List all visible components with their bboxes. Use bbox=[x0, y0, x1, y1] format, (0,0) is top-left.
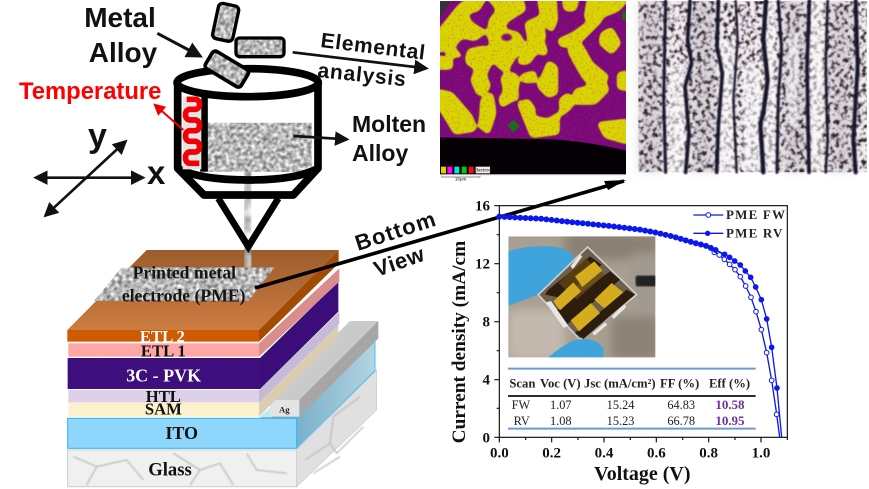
axis ticks bbox=[494, 206, 787, 442]
HTL layer bbox=[68, 312, 339, 406]
x tick labels: 0.2 bbox=[542, 445, 561, 461]
legend: PME RV bbox=[726, 225, 784, 240]
label: molten alloy: Molten bbox=[352, 111, 426, 137]
nozzle tip bbox=[218, 198, 278, 247]
molten alloy fill bbox=[207, 123, 312, 172]
label: temperature: Temperature bbox=[19, 78, 161, 105]
label: bottom view bbox=[352, 206, 440, 282]
magenta speckle bbox=[440, 1, 626, 141]
data table: Voc (V) bbox=[540, 376, 581, 390]
data table: 1.07 bbox=[550, 398, 572, 412]
y axis arrow bbox=[46, 142, 125, 215]
yellow phase blobs bbox=[437, 0, 628, 143]
green edge spot bbox=[622, 12, 626, 20]
x tick labels: 1.0 bbox=[752, 445, 770, 461]
crucible rim bbox=[177, 69, 318, 97]
hole in yellow phase bbox=[501, 34, 512, 41]
arrow: metal alloy bbox=[157, 33, 200, 56]
dark corner bbox=[440, 1, 451, 17]
y tick labels: 16 bbox=[475, 198, 491, 214]
perovskite layer: 3C - PVK bbox=[126, 365, 201, 385]
label: metal alloy: Metal bbox=[84, 2, 156, 33]
black substrate region bbox=[440, 137, 626, 174]
arrow: molten alloy bbox=[293, 136, 347, 139]
data table: FF (%) bbox=[660, 376, 699, 390]
x tick labels bbox=[490, 445, 770, 461]
data table: Jsc (mA/cm²) bbox=[584, 376, 656, 390]
y axis title: Current density (mA/cm bbox=[449, 241, 470, 443]
lower glove bbox=[548, 339, 603, 357]
y tick labels: 0 bbox=[482, 430, 490, 446]
printed metal electrode: Printed metal bbox=[133, 263, 236, 283]
label: x axis: x bbox=[147, 154, 166, 191]
label: metal alloy: Alloy bbox=[89, 37, 158, 68]
data table: Eff (%) bbox=[709, 376, 750, 390]
label: bottom view: View bbox=[370, 241, 428, 282]
optical micrograph of printed lines bbox=[638, 1, 867, 172]
x tick labels: 0.8 bbox=[699, 445, 718, 461]
warm tint over the micrograph bbox=[638, 1, 867, 172]
data table: FW bbox=[512, 398, 531, 412]
label: molten alloy bbox=[352, 111, 426, 166]
alloy stream bbox=[244, 170, 252, 268]
HTL layer: HTL bbox=[146, 387, 181, 406]
reverse scan curve bbox=[499, 217, 782, 437]
printed metal electrode: electrode (PME) bbox=[122, 285, 246, 305]
upper glove bbox=[508, 246, 574, 306]
amber film bbox=[558, 258, 605, 300]
SAM layer bbox=[68, 323, 338, 419]
label: y axis: y bbox=[88, 117, 107, 155]
label: metal alloy bbox=[84, 2, 158, 68]
background tones bbox=[508, 233, 658, 360]
arrow: elemental analysis bbox=[293, 52, 426, 68]
pellet 1 outline bbox=[212, 3, 240, 42]
label: elemental analysis: analysis bbox=[316, 59, 408, 91]
label: elemental analysis: Elemental bbox=[319, 29, 427, 65]
data table: RV bbox=[514, 414, 530, 428]
arrow: temperature bbox=[155, 105, 183, 130]
data table: 10.95 bbox=[715, 413, 745, 428]
ETL 1 layer bbox=[68, 268, 339, 361]
perovskite layer bbox=[68, 282, 338, 389]
forward scan curve bbox=[499, 217, 780, 437]
white edge strips bbox=[546, 255, 626, 336]
bright line highlights bbox=[668, 1, 823, 172]
printed metal electrode bbox=[94, 263, 274, 305]
Ag contact: Ag bbox=[279, 404, 290, 414]
dark tape strips bbox=[545, 256, 635, 339]
x tick labels: 0.4 bbox=[595, 445, 614, 461]
ETL 1 layer: ETL 1 bbox=[141, 342, 186, 361]
label: elemental analysis bbox=[316, 29, 427, 91]
device layer stack bbox=[67, 250, 378, 487]
x axis arrow bbox=[36, 174, 143, 182]
SAM layer: SAM bbox=[145, 400, 182, 419]
ITO layer bbox=[68, 342, 375, 448]
heating coil bbox=[185, 99, 199, 163]
inset photo of device bbox=[508, 233, 658, 360]
scale bar bracket bbox=[442, 176, 480, 177]
ITO layer: ITO bbox=[165, 423, 198, 443]
darker line regions bbox=[638, 1, 852, 172]
ETL 2 layer: ETL 2 bbox=[140, 327, 185, 346]
green inclusion bbox=[508, 119, 520, 133]
data table: Scan bbox=[509, 376, 535, 390]
data table: 64.83 bbox=[667, 398, 695, 412]
pellet 2 outline bbox=[236, 38, 284, 57]
data table bbox=[508, 369, 756, 429]
gold electrode pads bbox=[553, 261, 623, 331]
y tick labels: 12 bbox=[475, 257, 490, 273]
map legend chips bbox=[441, 167, 492, 173]
JV chart bbox=[449, 198, 787, 485]
pellet 3 bbox=[204, 50, 250, 88]
inner wall bbox=[203, 95, 207, 172]
data table: 15.23 bbox=[607, 414, 634, 428]
pellet 3 outline bbox=[204, 50, 250, 88]
dark object in background bbox=[636, 276, 656, 286]
dark gaps between lines bbox=[664, 1, 858, 172]
Ag contact bbox=[270, 321, 378, 417]
ETL 2 layer bbox=[67, 250, 339, 346]
pellet 1 bbox=[212, 3, 240, 42]
bottom view pointer line bbox=[255, 180, 626, 288]
scale bar value: 10μm bbox=[455, 176, 466, 181]
map legend chips: Electron bbox=[474, 168, 492, 173]
printing nozzle and crucible bbox=[36, 3, 426, 247]
y tick labels bbox=[475, 198, 491, 446]
y tick labels: 4 bbox=[482, 373, 490, 389]
data table: 66.78 bbox=[667, 414, 695, 428]
legend bbox=[693, 207, 786, 240]
crucible body bbox=[178, 82, 318, 195]
inner wall thinning bbox=[183, 97, 201, 169]
data table: 1.08 bbox=[550, 414, 572, 428]
pellet 2 bbox=[236, 38, 284, 57]
label: bottom view: Bottom bbox=[352, 206, 440, 256]
data table: 10.58 bbox=[715, 397, 745, 412]
x tick labels: 0.0 bbox=[490, 445, 509, 461]
data table: 15.24 bbox=[607, 398, 634, 412]
plot frame bbox=[499, 206, 787, 437]
device substrate bbox=[538, 247, 637, 340]
x axis title: Voltage (V) bbox=[594, 463, 691, 485]
glass layer: Glass bbox=[148, 460, 192, 481]
label: molten alloy: Alloy bbox=[352, 140, 408, 166]
glass layer bbox=[68, 370, 377, 487]
x tick labels: 0.6 bbox=[647, 445, 666, 461]
y tick labels: 8 bbox=[482, 315, 490, 331]
elemental map image bbox=[437, 0, 628, 181]
photo background bbox=[508, 236, 655, 357]
legend: PME FW bbox=[726, 207, 786, 222]
map scale bar bbox=[440, 173, 626, 176]
